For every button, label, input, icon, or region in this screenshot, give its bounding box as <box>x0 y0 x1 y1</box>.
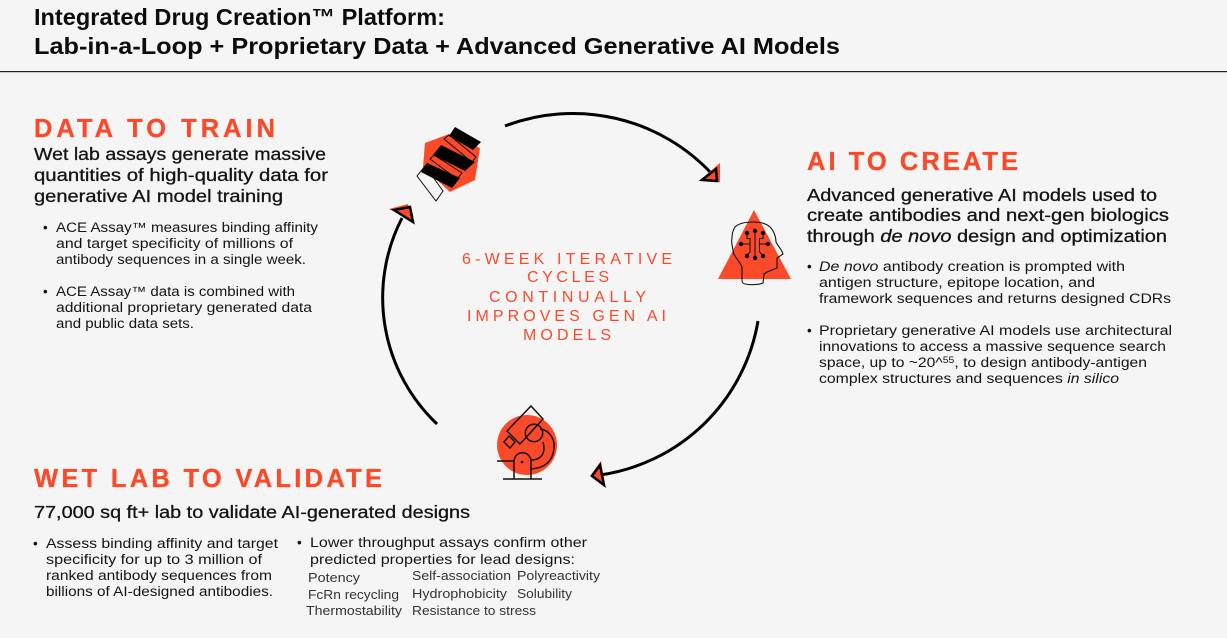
bullet: ACE Assay measures: ACE Assay™ measures binding affinity <box>56 220 318 235</box>
bullet: ACE Assay measures <box>43 220 318 267</box>
bullet: assess binding: specificity for up to 3 million of <box>46 552 262 567</box>
panel: wet lab to validate <box>33 465 601 618</box>
text block: data to train summary <box>34 144 328 206</box>
text block: AI to create summary: Advanced generative AI models used to <box>807 185 1157 205</box>
text block: data to train summary: generative AI model training <box>34 186 283 206</box>
text block: center cycle message <box>462 251 672 344</box>
bullet: proprietary models: space, up to ~20^ <box>819 355 926 370</box>
bullet: ACE Assay measures: antibody sequences in a single week. <box>56 252 306 267</box>
bullet: proprietary models: 55 <box>943 355 954 365</box>
list: predicted properties: Solubility <box>517 587 573 601</box>
bullet: proprietary models: , to design antibody-antigen <box>954 355 1147 370</box>
bullet: assess binding <box>33 536 278 599</box>
bullet: lower throughput: Lower throughput assays confirm other <box>310 535 588 550</box>
list: predicted properties: Polyreactivity <box>517 569 601 583</box>
arrow: wet lab to data <box>383 204 437 424</box>
icon: AI head <box>718 210 791 285</box>
bullet: assess binding: billions of AI-designed antibodies. <box>46 584 273 599</box>
bullet: de novo creation: • <box>807 259 812 274</box>
title <box>34 4 840 59</box>
list: predicted properties: Hydrophobicity <box>412 587 508 601</box>
bullet: ACE Assay data: • <box>43 284 48 299</box>
list: predicted properties <box>306 569 601 618</box>
list: predicted properties: Self-association <box>412 569 511 583</box>
bullet: assess binding: Assess binding affinity and target <box>46 536 278 551</box>
text block: center cycle message: IMPROVES GEN AI <box>467 308 666 325</box>
bullet: assess binding: ranked antibody sequences from <box>46 568 272 583</box>
list: predicted properties: Potency <box>308 571 361 585</box>
text block: lab summary: 77,000 sq ft+ lab to validate AI-generated designs <box>34 502 470 522</box>
bullet: lower throughput: • <box>297 535 302 550</box>
bullet: proprietary models: innovations to access a massive sequence search <box>819 339 1166 354</box>
bullet: ACE Assay measures: • <box>43 220 48 235</box>
text block: AI to create summary: create antibodies and next-gen biologics <box>807 205 1169 225</box>
panel: AI to create <box>807 148 1172 386</box>
list: predicted properties: Resistance to stress <box>412 604 536 618</box>
bullet: proprietary models: Proprietary generative AI models use architectural <box>819 323 1172 338</box>
bullet: proprietary models: complex structures and sequences in silico <box>819 371 1120 386</box>
bullet: ACE Assay data: and public data sets. <box>56 316 194 331</box>
bullet: de novo creation: antigen structure, epitope location, and <box>819 275 1095 290</box>
bullet: ACE Assay data <box>43 284 313 331</box>
panel: data to train <box>34 115 328 331</box>
text block: center cycle message: 6-WEEK ITERATIVE <box>462 251 672 268</box>
text block: center cycle message: CYCLES <box>527 269 609 286</box>
title: Integrated Drug Creation™ Platform: <box>34 4 445 30</box>
text block: AI to create summary: through de novo design and optimization <box>807 226 1167 246</box>
bullet: de novo creation: De novo antibody creation is prompted with <box>819 259 1125 274</box>
bullet: lower throughput: predicted properties for lead designs: <box>310 552 575 567</box>
icon: microscope <box>497 406 557 479</box>
bullet: de novo creation: framework sequences and returns designed CDRs <box>819 291 1171 306</box>
text block: AI to create summary <box>807 185 1169 246</box>
heading: data to train: DATA TO TRAIN <box>34 115 275 143</box>
icon: data hexagon with stacked bars <box>417 127 481 201</box>
bullet: ACE Assay measures: and target specificity of millions of <box>56 236 293 251</box>
text block: center cycle message: MODELS <box>523 327 611 344</box>
heading: wet lab to validate: WET LAB TO VALIDATE <box>34 465 382 493</box>
arrow: AI to wet lab <box>590 321 758 486</box>
bullet: proprietary models <box>807 323 1172 386</box>
bullet: proprietary models: • <box>807 323 812 338</box>
bullet: ACE Assay data: ACE Assay™ data is combined with <box>56 284 295 299</box>
text block: data to train summary: quantities of high-quality data for <box>34 165 328 185</box>
text block: data to train summary: Wet lab assays generate massive <box>34 144 326 164</box>
arrow: data to AI <box>505 113 720 182</box>
bullet: assess binding: • <box>33 536 38 551</box>
list: predicted properties: FcRn recycling <box>308 588 399 602</box>
bullet: ACE Assay data: additional proprietary generated data <box>56 300 313 315</box>
bullet: de novo creation <box>807 259 1171 306</box>
title: Lab-in-a-Loop + Proprietary Data + Advanced Generative AI Models <box>34 33 840 59</box>
bullet: lower throughput <box>297 535 588 567</box>
text block: center cycle message: CONTINUALLY <box>489 289 646 306</box>
heading: AI to create: AI TO CREATE <box>807 148 1018 176</box>
list: predicted properties: Thermostability <box>306 604 403 618</box>
